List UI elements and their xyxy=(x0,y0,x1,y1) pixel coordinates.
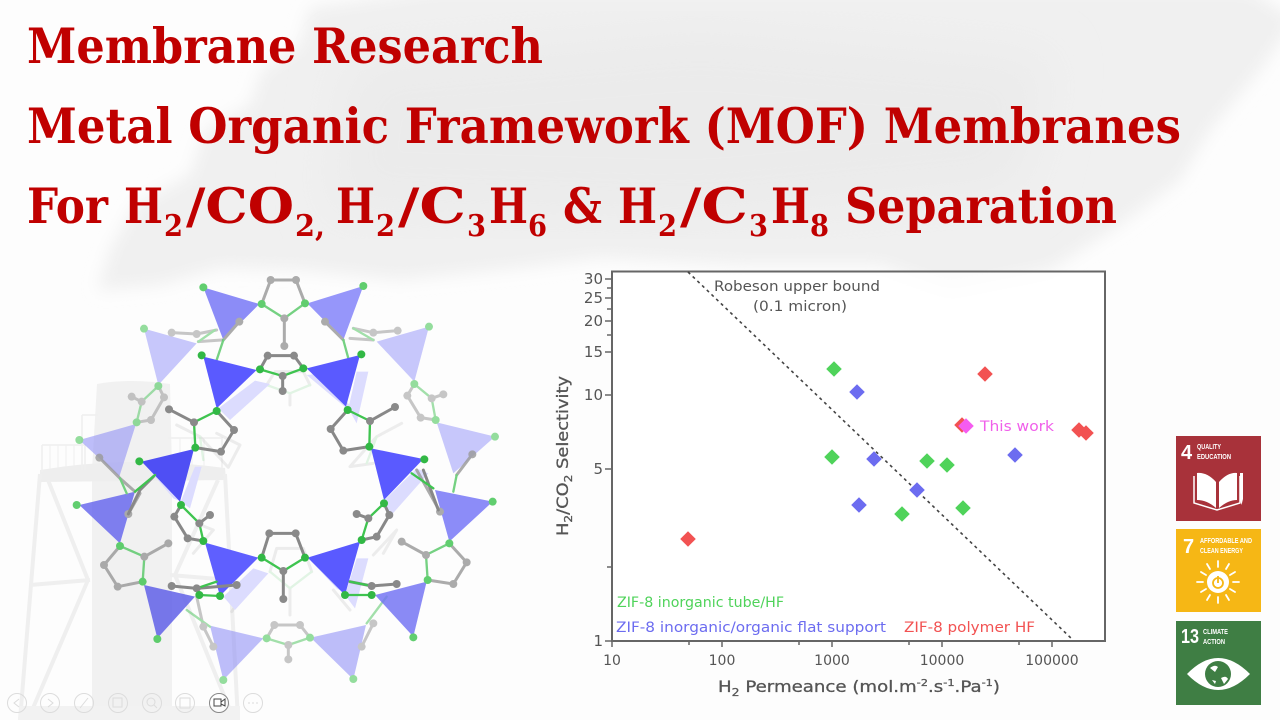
this work data point xyxy=(958,418,974,434)
SDG 13 tile: CLIMATE xyxy=(1203,629,1228,636)
title line 3: H xyxy=(124,177,163,235)
front ring xyxy=(128,350,438,603)
x axis numbers: 100000 xyxy=(1025,653,1079,669)
title line 3: 2 xyxy=(164,209,183,244)
icon: eye with globe xyxy=(1187,658,1250,690)
x axis numbers: 10000 xyxy=(920,653,964,669)
plot area xyxy=(612,272,1105,641)
Robeson label: (0.1 micron) xyxy=(753,299,847,315)
axis ticks xyxy=(605,279,1052,647)
title line 3: H xyxy=(618,177,657,235)
title line 3: & xyxy=(563,177,602,235)
SDG 7 tile xyxy=(1176,529,1261,612)
x axis title: -1 xyxy=(982,678,993,689)
y axis numbers: 20 xyxy=(584,312,603,330)
this work label: This work xyxy=(979,419,1055,435)
background: chimney and lattice tower xyxy=(18,381,240,720)
legend: blue: ZIF-8 inorganic/organic flat support xyxy=(616,620,887,636)
SDG 13 tile: ACTION xyxy=(1203,639,1225,646)
y axis numbers: 1 xyxy=(593,632,603,650)
background: smoke cloud xyxy=(98,0,1280,290)
SDG 4 tile: 4 xyxy=(1181,442,1193,464)
x axis title: .Pa xyxy=(955,677,982,696)
SDG 4 tile: QUALITY xyxy=(1197,444,1221,451)
x axis title: H xyxy=(718,677,730,696)
SDG 7 tile: CLEAN ENERGY xyxy=(1200,548,1243,555)
title line 3: /CO xyxy=(186,177,294,235)
x axis numbers: 1000 xyxy=(814,653,850,669)
x axis title: ) xyxy=(993,677,1000,696)
x axis numbers xyxy=(603,653,1079,669)
Robeson label: Robeson upper bound xyxy=(714,279,880,295)
title line 1: Membrane Research xyxy=(27,17,543,75)
legend: green: ZIF-8 inorganic tube/HF xyxy=(617,595,784,611)
title xyxy=(27,17,1181,248)
red data points xyxy=(680,366,1094,547)
icon: book and pencil xyxy=(1194,473,1243,510)
middle ring xyxy=(73,276,497,643)
y axis title: 2 xyxy=(562,515,575,523)
y axis title: /CO xyxy=(553,482,572,515)
scatter chart: H2/CO2 selectivity vs H2 permeance xyxy=(553,270,1105,699)
title line 3: 2, xyxy=(295,209,325,244)
x axis title: -1 xyxy=(943,678,955,689)
SDG 13 tile: 13 xyxy=(1181,626,1199,648)
y axis title: Selectivity xyxy=(553,376,572,475)
Robeson label xyxy=(714,279,880,315)
title line 3: Separation xyxy=(845,177,1117,235)
SDG 4 tile: EDUCATION xyxy=(1197,454,1231,461)
light outer ring xyxy=(75,323,499,684)
Robeson upper bound line xyxy=(688,272,1073,640)
title line 3: 8 xyxy=(810,209,829,244)
y axis numbers xyxy=(584,270,603,650)
SDG 7 tile: AFFORDABLE AND xyxy=(1200,538,1252,545)
y axis title: H xyxy=(553,524,572,536)
title line 3: 2 xyxy=(376,209,395,244)
pale ribbon tetrahedra xyxy=(147,372,428,610)
x axis title: -2 xyxy=(917,678,928,689)
title line 2: Metal Organic Framework (MOF) Membranes xyxy=(27,97,1181,155)
faint back layer linkers xyxy=(177,372,402,615)
SDG 4 tile xyxy=(1176,436,1261,521)
x axis numbers: 100 xyxy=(709,653,735,669)
x axis title: .s xyxy=(928,677,943,696)
title line 3: 3 xyxy=(749,209,768,244)
title line 3: 2 xyxy=(658,209,677,244)
title line 3: 3 xyxy=(467,209,486,244)
slideshow toolbar icons xyxy=(8,694,262,712)
x axis title: 2 xyxy=(732,686,740,699)
icon: sun with power symbol xyxy=(1197,561,1239,603)
x axis numbers: 10 xyxy=(603,653,621,669)
title line 3: /C xyxy=(398,177,466,235)
title line 3: H xyxy=(771,177,810,235)
SDG 7 tile: 7 xyxy=(1183,536,1194,558)
x axis title: Permeance (mol.m xyxy=(740,677,917,696)
title line 3: For xyxy=(27,177,109,235)
title line 3: H xyxy=(489,177,528,235)
y axis numbers: 5 xyxy=(593,460,603,478)
MOF crystal structure illustration xyxy=(73,276,499,684)
y axis numbers: 10 xyxy=(584,386,603,404)
legend: red: ZIF-8 polymer HF xyxy=(904,620,1035,636)
y axis numbers: 30 xyxy=(584,270,603,288)
y axis numbers: 15 xyxy=(584,343,603,361)
y axis numbers: 25 xyxy=(584,289,603,307)
blue data points xyxy=(849,384,1023,513)
title line 3: H xyxy=(336,177,375,235)
green data points xyxy=(824,361,971,522)
title line 3: /C xyxy=(680,177,748,235)
SDG 13 tile xyxy=(1176,621,1261,705)
y axis title: 2 xyxy=(562,475,575,482)
title line 3: 6 xyxy=(528,209,547,244)
